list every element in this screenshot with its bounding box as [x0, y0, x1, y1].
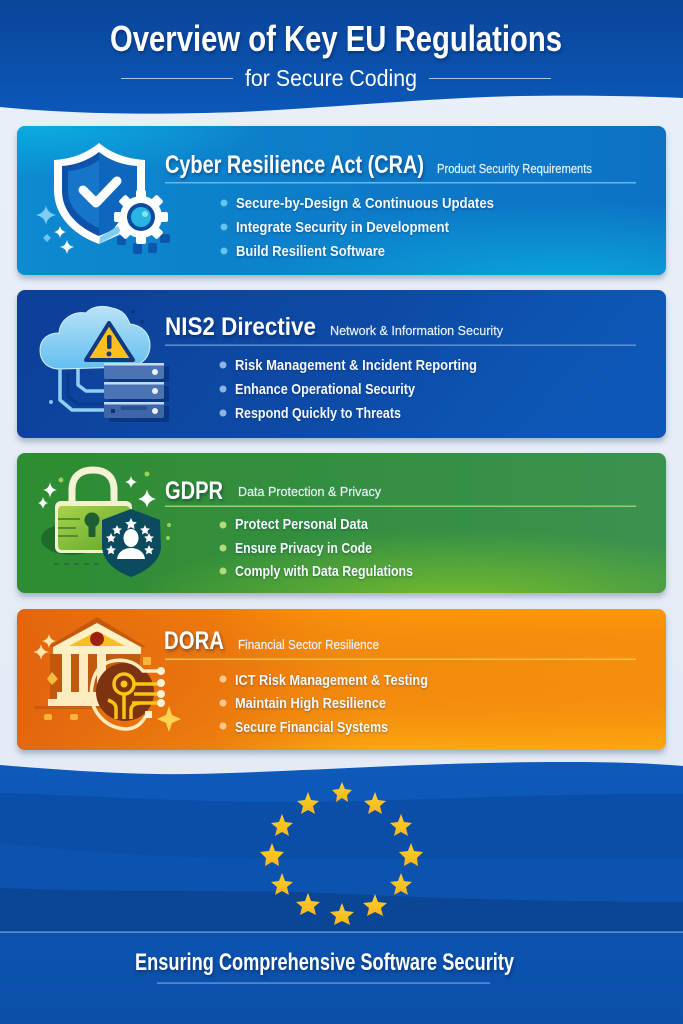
heading: GDPR: GDPR	[165, 477, 223, 505]
closing statement: Ensuring Comprehensive Software Security	[135, 949, 514, 976]
bullet list: NIS2	[220, 357, 477, 422]
bullet list: GDPR: Protect Personal Data	[235, 516, 369, 533]
bullet list: CRA: Integrate Security in Development	[236, 219, 449, 236]
EU star circle	[260, 782, 423, 925]
bullet list: DORA: Secure Financial Systems	[235, 719, 388, 736]
icon: bank and circuit shield	[33, 617, 181, 732]
title: Overview of Key EU Regulations	[110, 18, 562, 59]
bullet list: DORA: Maintain High Resilience	[235, 695, 386, 712]
bullet list: NIS2: Respond Quickly to Threats	[235, 405, 401, 422]
icon: cloud warning and servers	[40, 306, 169, 422]
bullet list: NIS2: Risk Management & Incident Reporting	[235, 357, 477, 374]
icon: padlock and EU privacy shield	[38, 470, 171, 577]
heading: NIS2: NIS2 Directive	[165, 313, 316, 341]
bullet list: DORA: ICT Risk Management & Testing	[235, 672, 428, 689]
subtitle: for Secure Coding	[245, 65, 417, 91]
heading: CRA: Cyber Resilience Act (CRA)	[165, 151, 424, 179]
header banner	[0, 0, 683, 114]
bullet list: GDPR: Comply with Data Regulations	[235, 563, 413, 580]
icon: shield with check and gear	[36, 143, 170, 254]
panel: DORA	[17, 609, 666, 750]
bullet list: CRA	[220, 195, 494, 260]
heading: DORA: DORA	[164, 627, 224, 655]
panel: NIS2 Directive	[17, 290, 666, 438]
subheading: NIS2: Network & Information Security	[330, 323, 503, 338]
panel: Cyber Resilience Act	[17, 126, 666, 275]
subheading: GDPR: Data Protection & Privacy	[238, 484, 381, 499]
footer banner	[0, 762, 683, 1024]
bullet list: CRA: Build Resilient Software	[236, 243, 385, 260]
bullet list: DORA	[220, 672, 428, 736]
bullet list: NIS2: Enhance Operational Security	[235, 381, 416, 398]
subheading: DORA: Financial Sector Resilience	[238, 637, 379, 652]
panel: GDPR	[17, 453, 666, 593]
bullet list: GDPR: Ensure Privacy in Code	[235, 540, 372, 557]
subheading: CRA: Product Security Requirements	[437, 161, 592, 176]
bullet list: GDPR	[220, 516, 413, 580]
bullet list: CRA: Secure-by-Design & Continuous Updates	[236, 195, 494, 212]
